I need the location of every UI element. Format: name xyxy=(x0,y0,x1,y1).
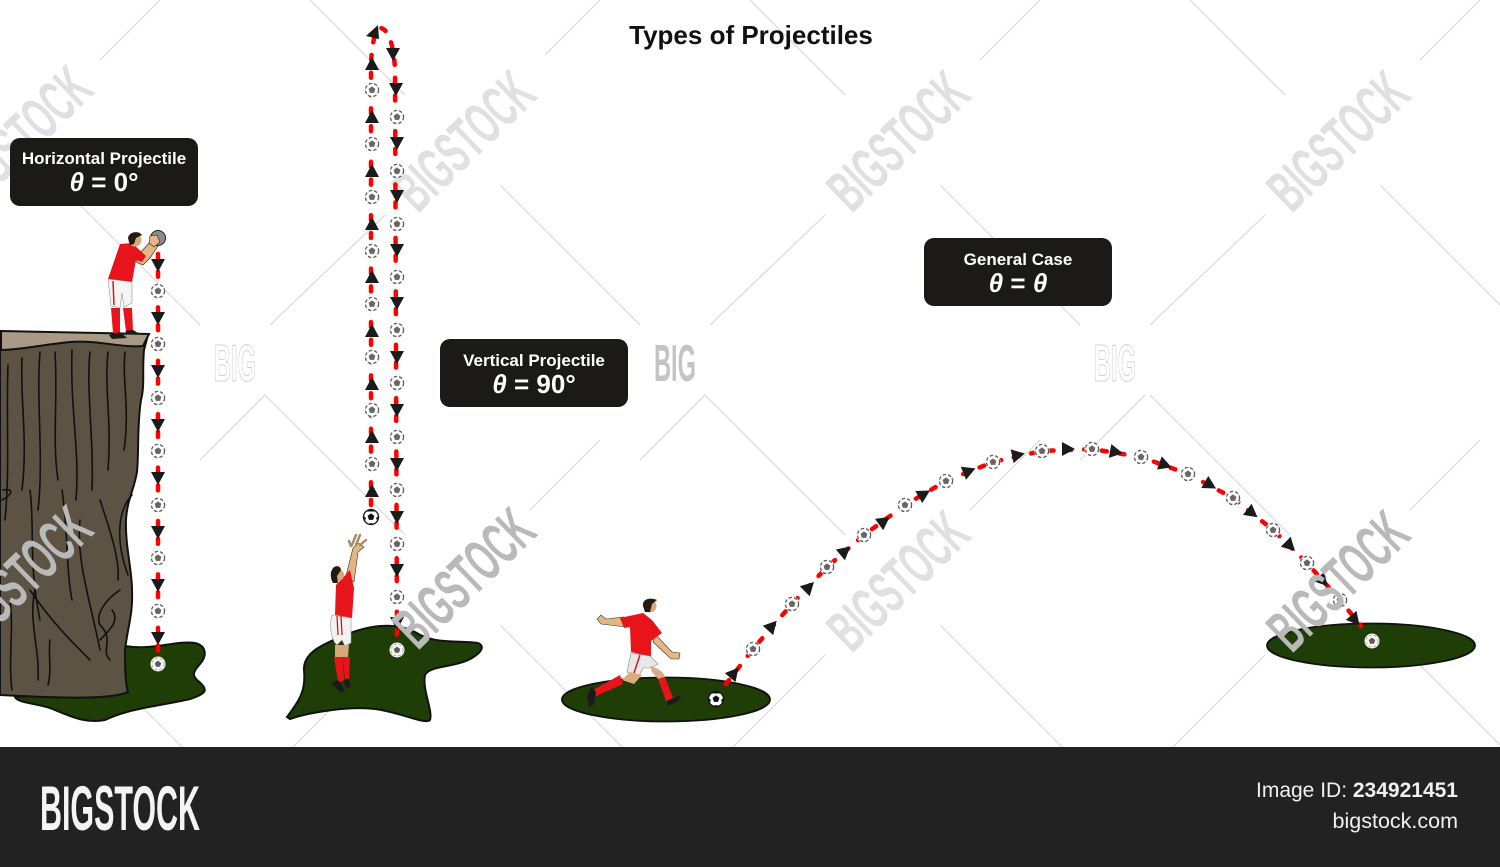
label: horizontal projectile: Horizontal Projectile xyxy=(22,149,186,168)
label: horizontal projectile: θ = 0° xyxy=(70,167,138,197)
watermark: top row xyxy=(0,54,1422,664)
label: general case xyxy=(924,238,1112,306)
label: vertical projectile: Vertical Projectile xyxy=(463,351,605,370)
cliff xyxy=(0,331,149,698)
image id: Image ID: 234921451 xyxy=(1256,779,1458,802)
player: kicking xyxy=(587,599,682,708)
title: Types of Projectiles xyxy=(629,20,873,50)
site name: bigstock.com xyxy=(1333,809,1458,833)
label: horizontal projectile xyxy=(10,138,198,206)
watermark: BIG marks: BIG xyxy=(214,335,256,393)
grass patch: under cliff xyxy=(15,643,205,721)
grass ellipse: landing xyxy=(1267,624,1475,668)
footer bar: BIGSTOCK xyxy=(40,774,200,844)
text: BIG xyxy=(1094,335,1136,393)
watermark: bottom row: BIGSTOCK xyxy=(380,496,548,661)
footer bar xyxy=(0,747,1500,867)
label: vertical projectile xyxy=(440,339,628,407)
grass ellipse: kick xyxy=(562,678,770,722)
watermark: bottom row xyxy=(0,494,1422,664)
label: general case: General Case xyxy=(964,250,1072,269)
grass patch: vertical projectile xyxy=(287,626,482,721)
trajectory: horizontal projectile xyxy=(150,254,166,672)
trajectory: vertical projectile xyxy=(364,25,405,658)
label: general case: θ = θ xyxy=(989,268,1047,298)
trajectory: general case xyxy=(708,441,1380,707)
player: vertical projectile xyxy=(331,535,366,693)
player: horizontal projectile xyxy=(108,230,166,339)
watermark: BIG marks xyxy=(214,335,1136,393)
watermark: top row: BIGSTOCK xyxy=(814,499,982,664)
label: vertical projectile: θ = 90° xyxy=(492,369,576,399)
watermark: BIG marks: BIG xyxy=(654,335,696,393)
